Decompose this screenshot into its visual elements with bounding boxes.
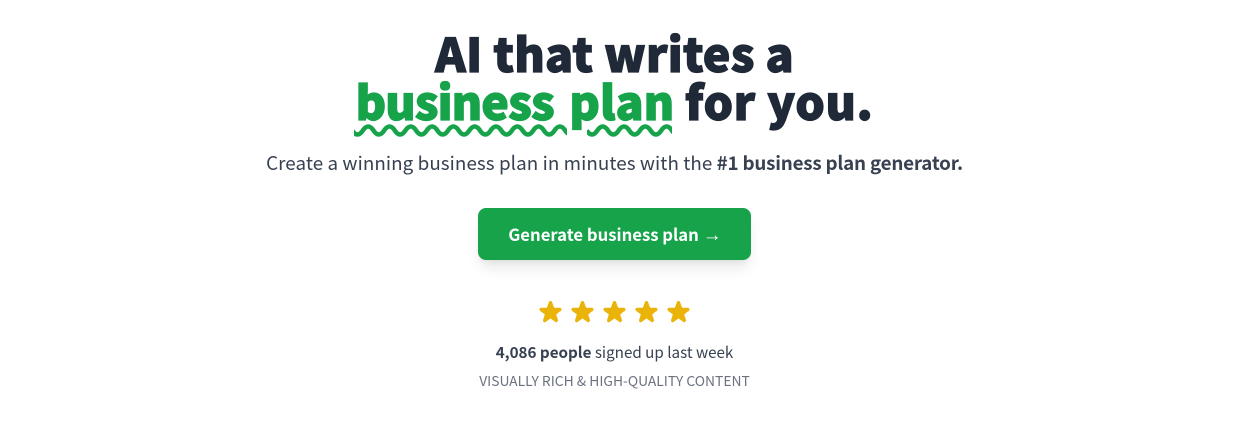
button: generate business plan: Generate business plan →: [508, 222, 722, 246]
icon: five star rating: [540, 301, 690, 322]
sign-up count: 4,086 people signed up last week: [496, 341, 733, 363]
icon: wavy green underline: [354, 124, 672, 137]
title: line 1: AI that writes a: [435, 19, 794, 86]
tagline: VISUALLY RICH & HIGH-QUALITY CONTENT: [479, 370, 750, 390]
title: line 2 with highlighted words: business plan for you.: [356, 67, 873, 134]
button: generate business plan: [478, 208, 751, 260]
subtitle: Create a winning business plan in minutes with the #1 business plan generator.: [266, 149, 963, 176]
